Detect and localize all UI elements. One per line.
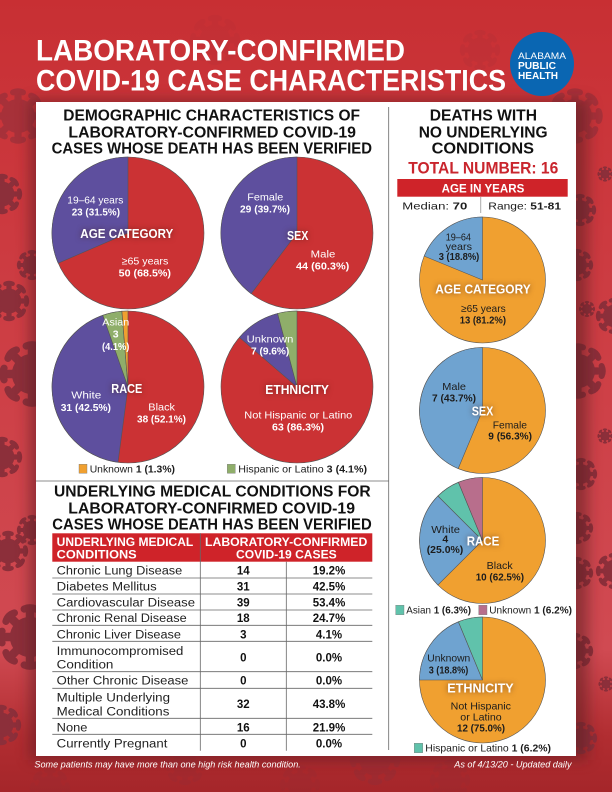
legend: hispanic or latino, no underlying conditions: Hispanic or Latino 1 (6.2%) [425, 743, 551, 755]
pie chart: race, no underlying conditions: White [431, 524, 460, 536]
row: multiple underlying medical conditions [57, 693, 345, 719]
row: cardiovascular disease: Cardiovascular Disease [57, 598, 195, 610]
row: diabetes mellitus: Diabetes Mellitus [57, 581, 157, 593]
legend: asian: Asian 1 (6.3%) [406, 605, 471, 617]
pie chart: race, no underlying conditions: (25.0%) [427, 544, 463, 556]
pie chart: ethnicity, no underlying conditions: Unknown [427, 653, 470, 665]
pie chart: sex, all cases: Male [311, 249, 335, 261]
logo: Alabama Public Health: ALABAMA [518, 51, 567, 62]
panel dividers [36, 107, 389, 750]
pie chart: age category, all cases: AGE CATEGORY [80, 226, 174, 241]
pie chart: sex, all cases: 44 (60.3%) [296, 261, 349, 273]
pie chart: race, all cases: 3 [113, 328, 119, 340]
logo: Alabama Public Health: PUBLIC [518, 61, 556, 72]
row: none: 16 [237, 722, 250, 734]
row: chronic renal disease [57, 613, 345, 625]
heading: demographic characteristics [52, 108, 372, 158]
pie chart: sex, all cases: Female [247, 192, 283, 204]
pie chart: age category, no underlying conditions: years [446, 241, 472, 253]
pie chart: age category, no underlying conditions: AGE CATEGORY [435, 282, 531, 297]
heading: underlying medical conditions: LABORATORY-CONFIRMED COVID-19 [68, 500, 355, 517]
pie chart: ethnicity, no underlying conditions: or Latino [460, 712, 502, 724]
table: underlying medical conditions [52, 533, 372, 751]
row: cardiovascular disease: 39 [237, 598, 250, 610]
row: cardiovascular disease [57, 598, 345, 610]
pie chart: age category, all cases: 23 (31.5%) [72, 207, 120, 219]
age median and range [402, 197, 561, 213]
pie chart: race, no underlying conditions: Black [487, 560, 513, 572]
pie chart: age category, all cases: 19–64 years [67, 194, 123, 206]
pie chart: race, no underlying conditions: 10 (62.5%) [476, 572, 524, 584]
table header: LABORATORY-CONFIRMED [205, 537, 367, 549]
heading: deaths with no underlying conditions: CONDITIONS [432, 141, 534, 158]
pie chart: ethnicity, no underlying conditions: ETHNICITY [447, 680, 514, 695]
pie chart: race, all cases: 38 (52.1%) [137, 414, 186, 426]
pie chart: sex, no underlying conditions [420, 348, 546, 474]
heading: deaths with no underlying conditions: NO UNDERLYING [419, 124, 548, 141]
pie chart: ethnicity, no underlying conditions [420, 617, 546, 743]
row: none [57, 722, 345, 734]
pie chart: race, all cases: White [71, 390, 101, 402]
row: currently pregnant: 0 [240, 739, 247, 751]
pie chart: race, all cases [52, 311, 204, 463]
age median and range: Range: 51-81 [488, 200, 561, 212]
row: immunocompromised condition: Immunocompromised [57, 646, 183, 658]
pie chart: age category, all cases: ≥65 years [122, 255, 168, 267]
row: chronic liver disease: 3 [240, 629, 247, 641]
row: chronic lung disease: 14 [237, 566, 250, 578]
legend: unknown: Unknown 1 (6.2%) [489, 605, 572, 617]
pie chart: ethnicity, no underlying conditions: 3 (18.8%) [429, 664, 468, 676]
row: diabetes mellitus: 31 [237, 581, 250, 593]
row: chronic liver disease [57, 629, 342, 641]
row: cardiovascular disease: 53.4% [313, 598, 345, 610]
pie chart: sex, all cases [221, 157, 373, 309]
pie chart: sex, no underlying conditions: Female [493, 420, 527, 432]
pie chart: age category, no underlying conditions [420, 217, 546, 343]
pie chart: ethnicity, all cases [221, 311, 373, 463]
heading: demographic characteristics: DEMOGRAPHIC CHARACTERISTICS OF [63, 108, 360, 125]
pie chart: race, all cases: Black [148, 402, 176, 414]
pie chart: ethnicity, no underlying conditions: 12 (75.0%) [457, 723, 505, 735]
pie chart: ethnicity, all cases: 7 (9.6%) [251, 346, 289, 358]
row: chronic liver disease: 4.1% [316, 629, 342, 641]
age in years bar: AGE IN YEARS [442, 184, 525, 196]
pie chart: sex, no underlying conditions: Male [442, 381, 466, 393]
legend: race unknown: Unknown 1 (1.3%) [90, 464, 175, 476]
row: multiple underlying medical conditions: 43.8% [313, 699, 345, 711]
heading: underlying medical conditions [52, 484, 372, 534]
heading: deaths with no underlying conditions: DEATHS WITH [430, 108, 537, 125]
pie chart: age category, all cases [52, 157, 204, 309]
heading: underlying medical conditions: UNDERLYING MEDICAL CONDITIONS FOR [54, 484, 371, 501]
row: chronic renal disease: Chronic Renal Disease [57, 613, 187, 625]
pie chart: ethnicity, all cases: ETHNICITY [265, 382, 329, 397]
row: immunocompromised condition: 0.0% [316, 652, 342, 664]
age in years bar [397, 179, 568, 197]
table header: COVID-19 CASES [236, 550, 337, 562]
pie chart: sex, no underlying conditions: 7 (43.7%) [432, 393, 476, 405]
pie chart: age category, no underlying conditions: 3 (18.8%) [439, 251, 479, 263]
pie chart: age category, no underlying conditions: 19–64 [446, 232, 471, 244]
row: none: 21.9% [313, 722, 345, 734]
pie chart: sex, all cases: SEX [287, 228, 309, 243]
footnote: Some patients may have more than one high risk health condition. [34, 760, 301, 770]
pie chart: race, all cases: (4.1%) [102, 341, 129, 353]
total number: TOTAL NUMBER: 16 [408, 159, 558, 177]
row: diabetes mellitus [57, 581, 345, 593]
row: other chronic disease: 0.0% [316, 675, 342, 687]
logo: Alabama Public Health: HEALTH [518, 71, 558, 82]
title: COVID-19 CASE CHARACTERISTICS [36, 64, 506, 98]
pie chart: race, all cases: Asian [102, 316, 129, 328]
heading: demographic characteristics: LABORATORY-CONFIRMED COVID-19 [68, 124, 356, 141]
row: immunocompromised condition: Condition [57, 660, 113, 672]
row: other chronic disease: 0 [240, 675, 247, 687]
white content panel [36, 102, 576, 756]
row: chronic lung disease: Chronic Lung Disease [57, 566, 182, 578]
update date: As of 4/13/20 - Updated daily [453, 760, 572, 770]
pie chart: ethnicity, all cases: Not Hispanic or Latino [244, 410, 352, 422]
title [36, 34, 506, 98]
pie chart: ethnicity, no underlying conditions: Not Hispanic [451, 700, 511, 712]
row: immunocompromised condition [57, 646, 342, 672]
pie chart: race, no underlying conditions [420, 478, 546, 604]
row: other chronic disease: Other Chronic Disease [57, 675, 188, 687]
row: currently pregnant [57, 739, 342, 751]
logo: Alabama Public Health [510, 32, 574, 96]
row: chronic lung disease [57, 566, 345, 578]
table header: CONDITIONS [57, 550, 137, 562]
heading: underlying medical conditions: CASES WHOSE DEATH HAS BEEN VERIFIED [52, 517, 372, 534]
row: chronic renal disease: 18 [237, 613, 250, 625]
table header [52, 533, 372, 562]
pie chart: race, no underlying conditions: RACE [467, 534, 500, 549]
pie chart: ethnicity, all cases: 63 (86.3%) [272, 422, 324, 434]
pie chart: race, all cases: RACE [111, 381, 143, 396]
table header: UNDERLYING MEDICAL [57, 537, 193, 549]
row: immunocompromised condition: 0 [240, 652, 247, 664]
title: LABORATORY-CONFIRMED [36, 34, 405, 68]
pie chart: age category, no underlying conditions: ≥65 years [461, 303, 506, 315]
pie chart: race, all cases: 31 (42.5%) [61, 402, 111, 414]
pie chart: age category, no underlying conditions: 13 (81.2%) [460, 314, 506, 326]
pie chart: sex, no underlying conditions: SEX [472, 404, 494, 419]
pie chart: sex, no underlying conditions: 9 (56.3%) [488, 431, 532, 443]
row: multiple underlying medical conditions: Multiple Underlying [57, 693, 170, 705]
pie chart: race, no underlying conditions: 4 [442, 533, 448, 545]
pie chart: ethnicity, all cases: Unknown [247, 334, 293, 346]
pie chart: sex, all cases: 29 (39.7%) [240, 204, 290, 216]
row: currently pregnant: 0.0% [316, 739, 342, 751]
row: none: None [57, 722, 87, 734]
heading: deaths with no underlying conditions [419, 108, 548, 158]
row: multiple underlying medical conditions: 32 [237, 699, 250, 711]
legend: hispanic or latino: Hispanic or Latino 3 (4.1%) [238, 464, 367, 476]
row: multiple underlying medical conditions: Medical Conditions [57, 707, 170, 719]
heading: demographic characteristics: CASES WHOSE DEATH HAS BEEN VERIFIED [52, 141, 372, 158]
row: chronic lung disease: 19.2% [313, 566, 345, 578]
age median and range: Median: 70 [402, 200, 467, 212]
pie chart: age category, all cases: 50 (68.5%) [119, 268, 171, 280]
row: chronic liver disease: Chronic Liver Disease [57, 629, 181, 641]
row: diabetes mellitus: 42.5% [313, 581, 345, 593]
row: other chronic disease [57, 675, 342, 687]
row: currently pregnant: Currently Pregnant [57, 739, 168, 751]
row: chronic renal disease: 24.7% [313, 613, 345, 625]
